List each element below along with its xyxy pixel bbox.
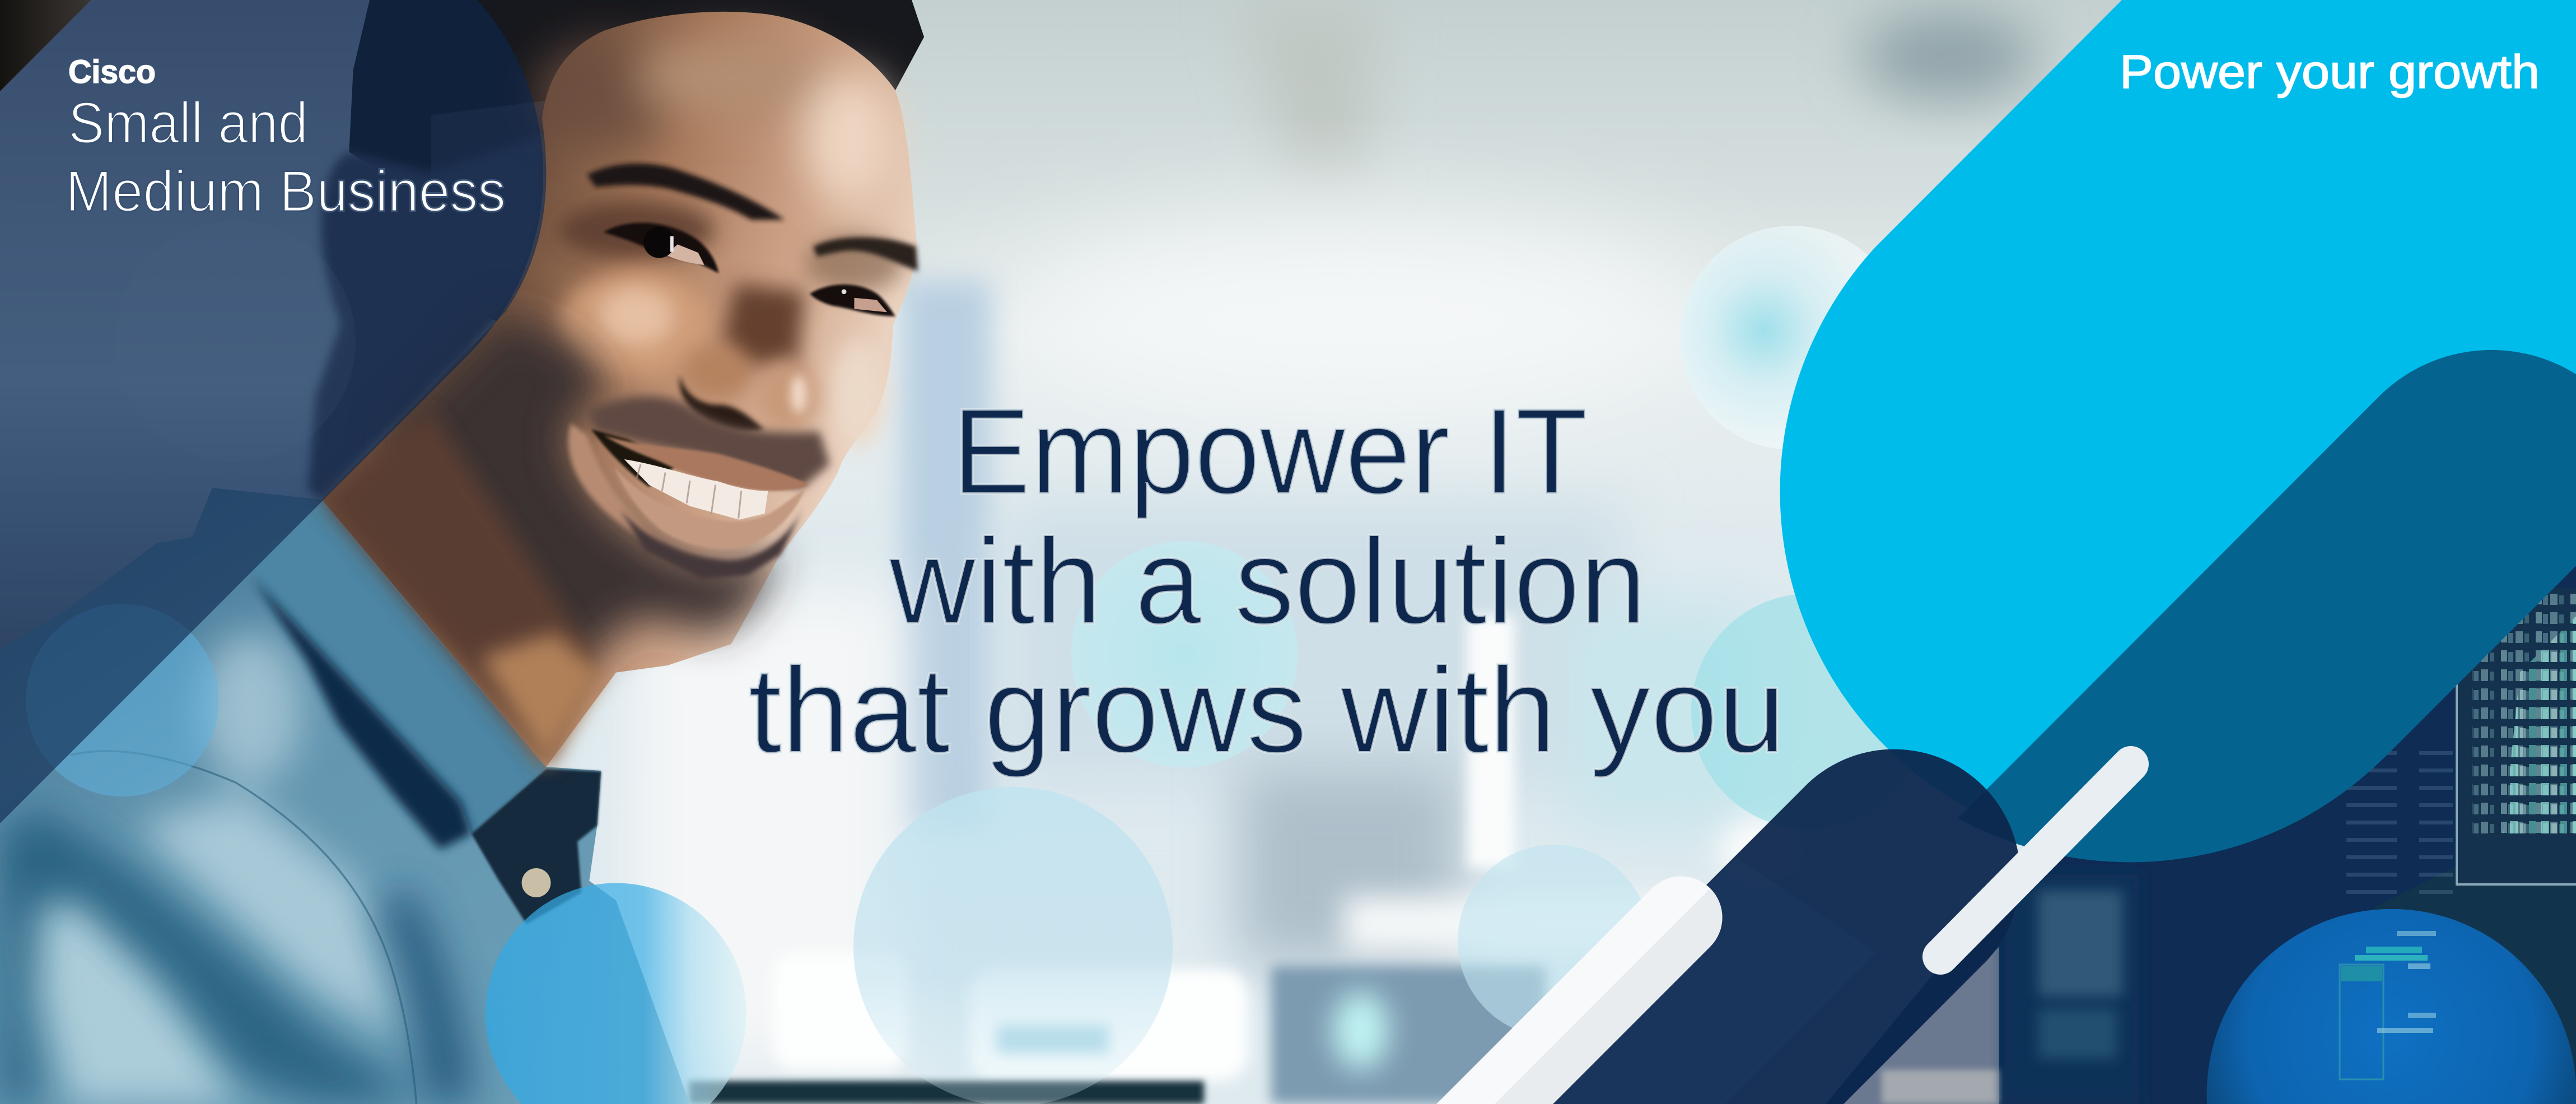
navy capsule overlay top left <box>0 0 543 823</box>
shirt: collar shadow <box>251 576 472 849</box>
lower right photo panel <box>1826 448 2576 1104</box>
head backing behind overlay edge <box>431 99 563 324</box>
navy band <box>1490 858 1876 1104</box>
neck: brown <box>322 411 595 767</box>
man: shirt <box>0 488 690 1104</box>
icon: shirt button <box>522 868 551 897</box>
crease skin <box>568 423 661 545</box>
moustache <box>587 396 829 489</box>
screen with code <box>2346 588 2576 902</box>
eye: left <box>604 223 718 273</box>
cheek <box>558 271 885 448</box>
dark teal capsule <box>1958 350 2576 862</box>
shirt: collar <box>251 504 546 833</box>
ear and neck in shadow <box>308 136 546 500</box>
skin <box>322 12 917 767</box>
segment title: Medium Business <box>66 159 506 224</box>
shirt: placket <box>472 769 601 924</box>
main heading <box>748 384 1785 779</box>
white capsule <box>1436 877 1723 1104</box>
nose <box>679 283 817 434</box>
bubbles over background <box>853 226 1926 1104</box>
translucent bubbles on man <box>26 221 746 1104</box>
teeth <box>624 459 768 520</box>
shirt: light folds <box>35 633 401 1104</box>
eyebrow: left <box>587 164 785 220</box>
light blue capsule <box>1780 0 2576 852</box>
main heading: with a solution <box>889 514 1646 650</box>
hair <box>349 0 924 206</box>
stubble: cheek and neck <box>390 312 780 674</box>
eyebrow: right <box>813 237 918 271</box>
main heading: that grows with you <box>748 642 1785 779</box>
shirt: seam <box>71 751 417 1104</box>
shirt: dark folds <box>0 810 475 1104</box>
man: head and face <box>308 0 924 767</box>
mouth shadow <box>591 429 678 487</box>
navy capsule bottom <box>1487 749 2020 1104</box>
brow and socket shading <box>558 201 903 292</box>
brand: Cisco: Cisco <box>68 54 156 90</box>
segment title <box>66 91 506 224</box>
neck: lit tip <box>480 632 604 767</box>
main heading: Empower IT <box>952 384 1588 520</box>
forehead shading <box>534 41 895 206</box>
upper lip <box>604 435 809 491</box>
blue circle with code <box>2206 909 2576 1104</box>
lower lip <box>614 466 805 549</box>
left photo backdrop <box>0 0 470 695</box>
white bar <box>1940 764 2131 957</box>
segment title: Small and <box>68 91 308 156</box>
dark corner <box>0 0 91 91</box>
eye: right <box>810 285 895 316</box>
chin stubble <box>620 505 805 579</box>
tagline: Power your growth <box>2120 45 2540 98</box>
